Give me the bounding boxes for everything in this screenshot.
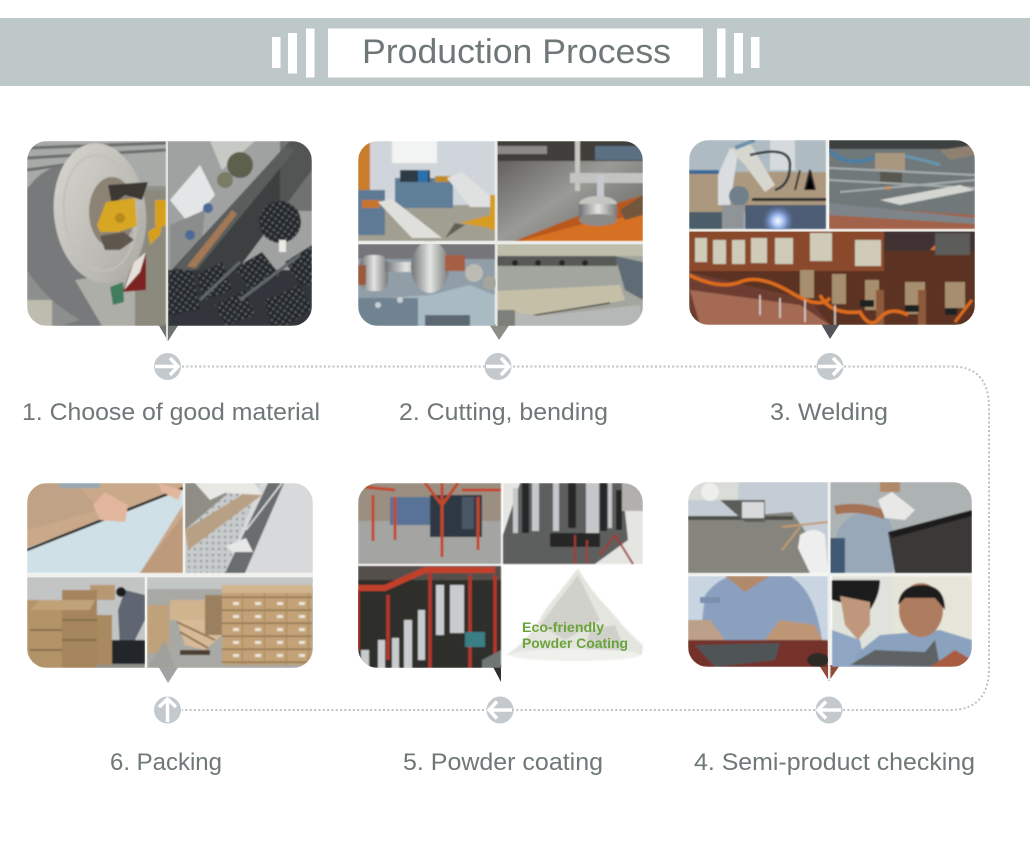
label: step 4: 4. Semi-product checking: [694, 749, 975, 776]
panel: step 1 photos: [27, 139, 312, 341]
arrow: step 5: [486, 696, 514, 724]
label: step 6: 6. Packing: [110, 749, 222, 776]
panel: step 5 photos: [358, 483, 643, 682]
pointer: step 2: [489, 324, 510, 340]
pointer: step 1: [158, 324, 179, 341]
arrow: step 6: [154, 696, 181, 724]
label: step 1: 1. Choose of good material: [22, 399, 320, 426]
pointer: step 5: [492, 665, 501, 682]
label: step 2: 2. Cutting, bending: [399, 399, 608, 426]
panel: step 4 photos: [688, 482, 972, 681]
header band: [0, 18, 1030, 86]
panel: step 3 photos: [689, 140, 975, 339]
pointer: step 3: [820, 322, 841, 339]
arrow: step 1: [154, 353, 181, 380]
label: step 5: 5. Powder coating: [403, 749, 603, 776]
arrow: step 4: [816, 696, 842, 724]
label: step 3: 3. Welding: [770, 399, 888, 426]
title: Production Process: [362, 33, 671, 71]
panel: step 2 photos: [358, 141, 643, 340]
pointer: step 6: [158, 666, 179, 683]
powder coating caption: Powder Coating: [522, 635, 628, 651]
panel: step 6 photos: [27, 483, 313, 683]
pointer: step 4: [819, 665, 840, 681]
dotted process path: [182, 366, 989, 710]
powder coating caption: Eco-friendly: [522, 619, 604, 635]
arrow: step 3: [816, 353, 844, 380]
arrow: step 2: [484, 353, 512, 380]
